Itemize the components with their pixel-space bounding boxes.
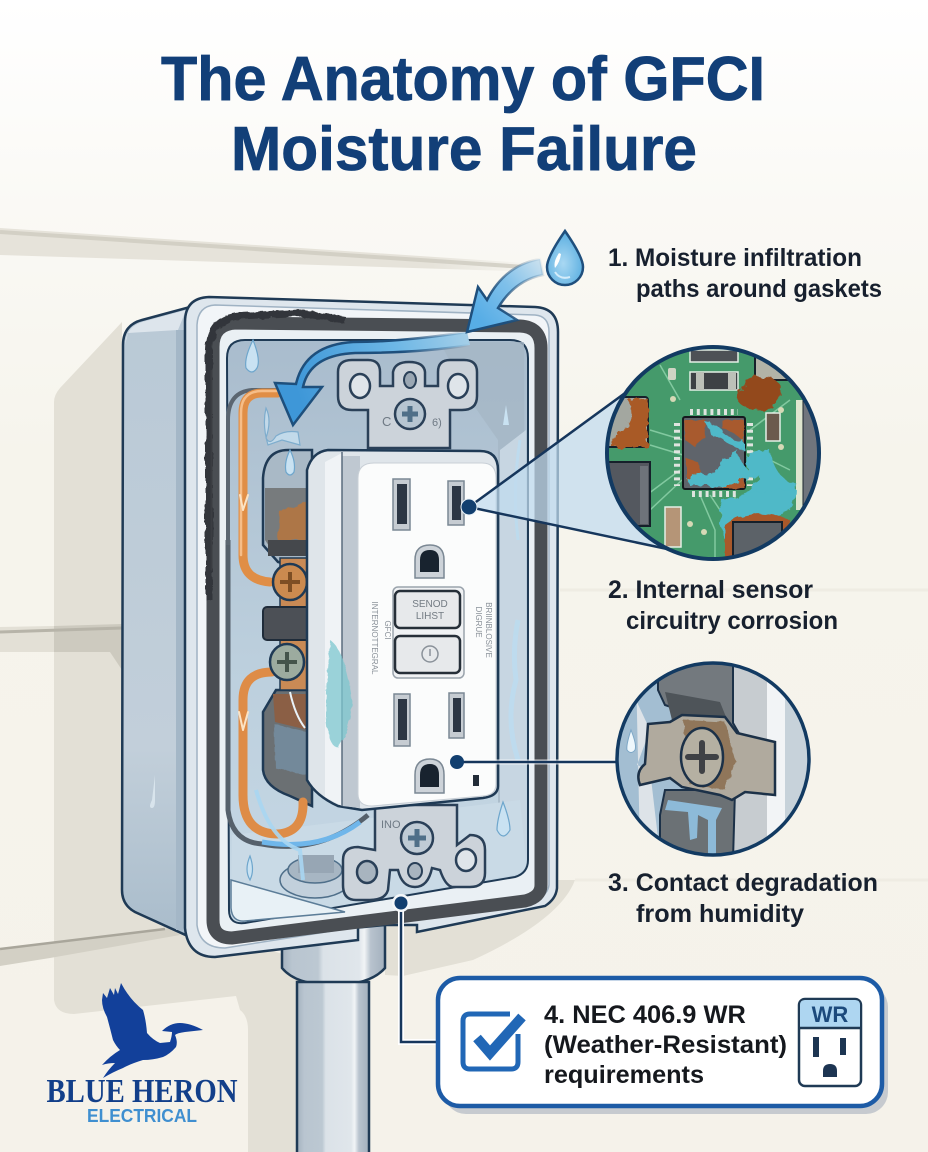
lower terminal housing	[263, 690, 312, 806]
left pad with rust	[604, 397, 648, 447]
enclosure box	[122, 297, 558, 957]
left dark component	[609, 461, 651, 527]
icon: heron	[102, 983, 203, 1078]
logo: Blue Heron Electrical	[46, 983, 238, 1126]
left wall with drop	[636, 702, 658, 836]
circuit traces	[640, 365, 790, 560]
faceplate side labels	[370, 602, 493, 675]
top right component and rust	[754, 358, 788, 381]
callout wedge to corroded circuit	[461, 380, 672, 550]
GFCI receptacle	[307, 450, 498, 810]
title	[161, 45, 765, 184]
test and reset buttons	[393, 587, 464, 678]
water dripping	[665, 800, 722, 854]
title: The Anatomy of GFCI	[161, 45, 765, 114]
right gray strip	[796, 400, 803, 510]
icon: checkbox	[463, 1014, 522, 1069]
logo: Blue Heron Electrical: ELECTRICAL	[87, 1106, 197, 1126]
outlet slots	[393, 479, 479, 793]
arrow: moisture path into box	[275, 332, 470, 425]
terminal screws	[270, 564, 307, 680]
callout text: (Weather-Resistant)	[544, 1031, 787, 1059]
conduit grommet	[280, 855, 350, 898]
callout text: 4. NEC 406.9 WR	[544, 1001, 746, 1029]
callout text: requirements	[544, 1061, 704, 1089]
metal clamp plate	[638, 715, 775, 800]
label 1: 1. Moisture infiltration	[608, 244, 862, 272]
label 3: from humidity	[636, 900, 804, 928]
small parts	[665, 350, 784, 547]
icon: WR outlet	[799, 999, 861, 1086]
label 1	[608, 244, 882, 303]
top mounting strap	[338, 360, 477, 448]
label 1: paths around gaskets	[636, 275, 882, 303]
dark bottom bracket	[660, 790, 735, 860]
faceplate	[358, 463, 496, 806]
label 2	[608, 576, 838, 635]
terminal bracket and clamp	[263, 558, 335, 690]
top mounting strap: C	[382, 414, 391, 429]
top mounting strap: 6)	[432, 417, 442, 429]
bottom mounting strap: INO	[381, 819, 401, 831]
housing side	[307, 450, 498, 810]
faceplate side labels: DIGRUE	[474, 606, 483, 638]
label 3: 3. Contact degradation	[608, 869, 878, 897]
faceplate side labels: BRIINBLOSIVE	[484, 602, 493, 658]
callout line to contact	[450, 755, 617, 769]
inset: corroded contact	[617, 660, 815, 860]
water streaks	[256, 440, 520, 880]
bottom component with rust	[725, 514, 790, 560]
icon: water drop	[547, 231, 583, 285]
leader line to NEC box	[392, 894, 438, 1042]
rust on chip	[685, 420, 744, 488]
box front frame	[185, 297, 558, 957]
moisture stain	[326, 640, 352, 748]
icon: WR outlet: WR	[812, 1002, 848, 1027]
inset: circuit board corrosion	[600, 347, 823, 562]
screw	[681, 728, 723, 786]
dark top bracket	[658, 660, 740, 735]
chip	[683, 417, 745, 489]
label 3	[608, 869, 878, 928]
gasket	[213, 323, 541, 938]
water drops	[150, 340, 510, 880]
test and reset buttons: SENOD	[412, 599, 448, 610]
orange wires	[239, 391, 303, 834]
dark wire loop	[228, 390, 368, 846]
callout: NEC 406.9 box	[438, 978, 888, 1114]
label 2: circuitry corrosion	[626, 607, 838, 635]
right panels	[734, 667, 767, 850]
teal corrosion	[686, 422, 798, 545]
bottom mounting strap	[343, 805, 485, 900]
arrow: moisture entering gasket	[467, 259, 543, 332]
chip pins	[677, 412, 750, 494]
charred gasket damage	[209, 313, 345, 600]
faceplate side labels: GFCI	[383, 620, 392, 640]
cavity	[227, 340, 528, 923]
test and reset buttons: LIHST	[416, 611, 444, 622]
callout text	[544, 1001, 787, 1089]
box side wall	[122, 307, 190, 937]
conduit pipe	[282, 925, 385, 1152]
logo: Blue Heron Electrical: BLUE HERON	[46, 1073, 238, 1110]
faceplate side labels: INTERNOTTEGRAL	[370, 602, 379, 675]
label 2: 2. Internal sensor	[608, 576, 813, 604]
upper terminal housing	[263, 450, 312, 570]
title: Moisture Failure	[231, 115, 697, 184]
